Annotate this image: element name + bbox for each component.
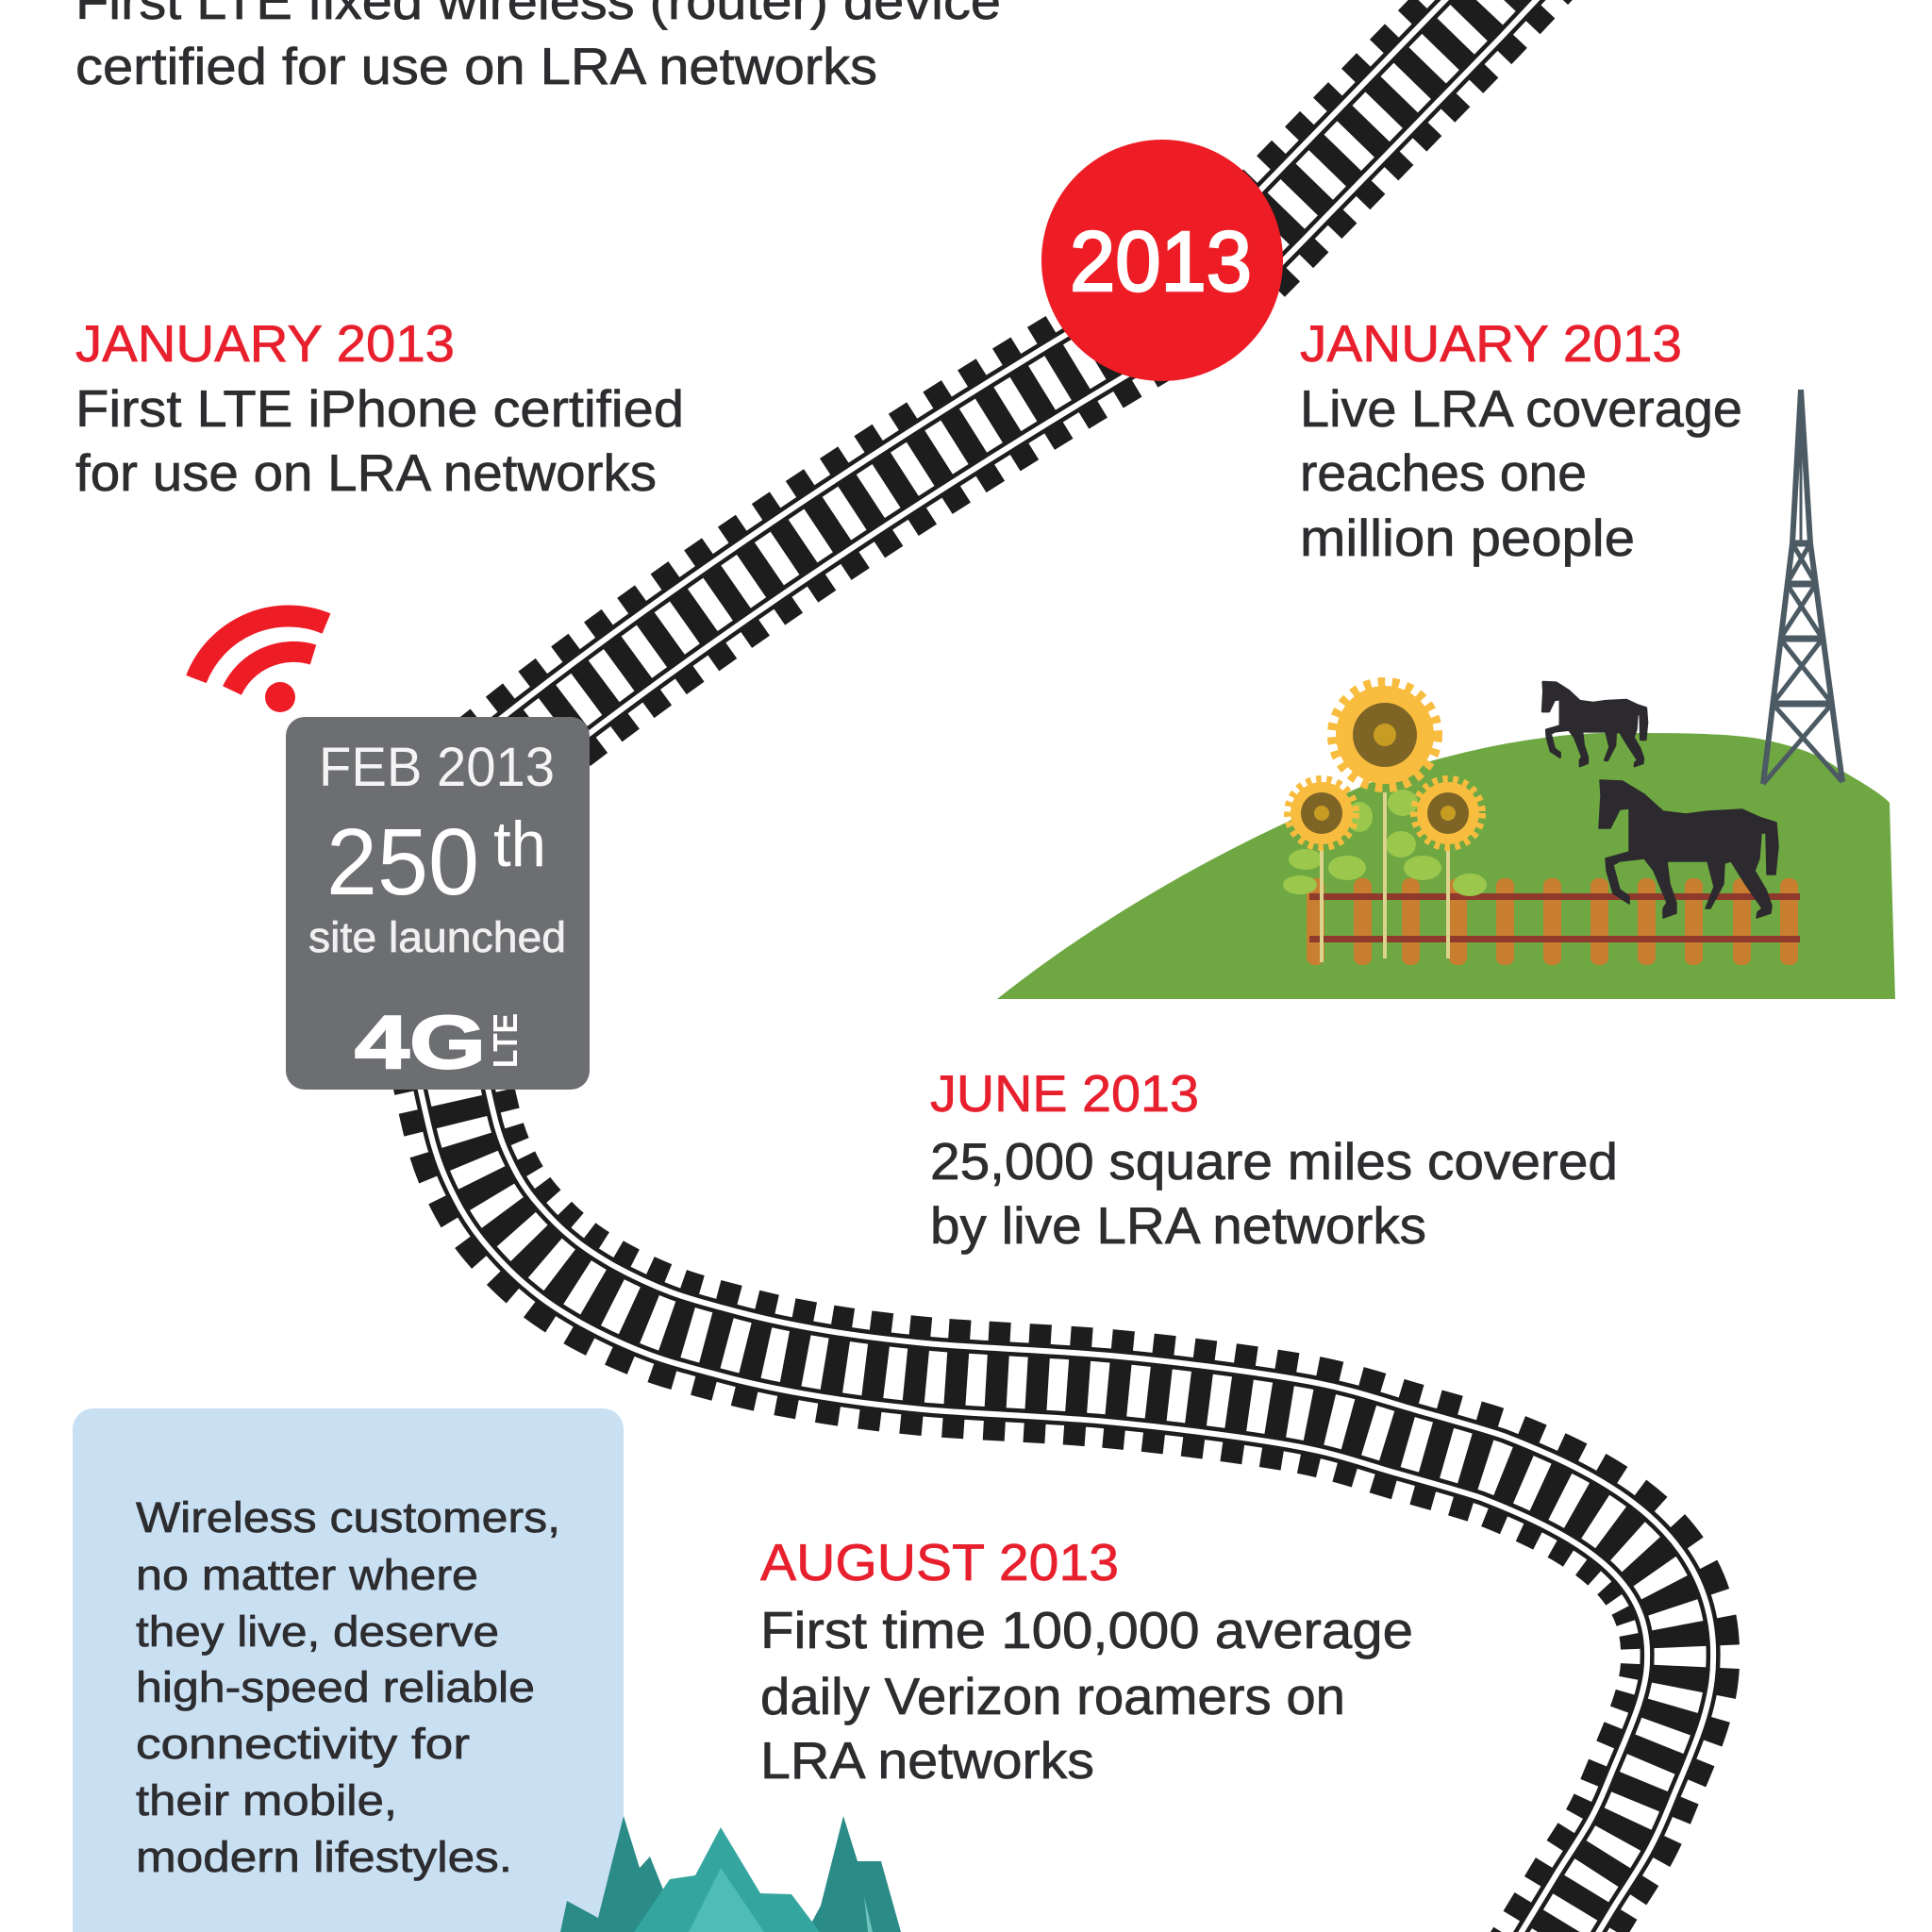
panel: customer quote xyxy=(73,1408,624,1932)
panel: customer quote: connectivity for xyxy=(136,1720,470,1768)
text: August 2013: First time 100,000 average xyxy=(760,1601,1413,1659)
year marker: 2013 xyxy=(1041,140,1283,381)
text: August 2013: daily Verizon roamers on xyxy=(760,1667,1345,1725)
callout: Feb 2013 250th site: site launched xyxy=(308,913,566,961)
small horse xyxy=(1542,682,1647,766)
text: January 2013 iPhone: First LTE iPhone certified xyxy=(75,379,684,438)
callout: Feb 2013 250th site: 4G xyxy=(355,1000,486,1084)
panel: customer quote: high-speed reliable xyxy=(136,1663,535,1711)
tower xyxy=(1763,390,1842,784)
sunflowers xyxy=(1283,686,1487,962)
text: January 2013 iPhone: JANUARY 2013 xyxy=(75,314,455,373)
text: August 2013 xyxy=(760,1533,1413,1790)
panel: customer quote: modern lifestyles. xyxy=(136,1833,512,1881)
text: June 2013: by live LRA networks xyxy=(930,1196,1426,1255)
panel: customer quote: Wireless customers, xyxy=(136,1493,560,1541)
text: January 2013 coverage: Live LRA coverage xyxy=(1300,379,1742,438)
panel: customer quote: no matter where xyxy=(136,1551,478,1599)
callout: Feb 2013 250th site xyxy=(286,717,590,1090)
fence xyxy=(1307,878,1800,965)
callout: Feb 2013 250th site: th xyxy=(493,808,546,880)
callout: Feb 2013 250th site: FEB 2013 xyxy=(319,737,555,798)
panel: customer quote: their mobile, xyxy=(136,1776,397,1824)
text: August 2013: LRA networks xyxy=(760,1731,1094,1790)
year marker: 2013: 2013 xyxy=(1070,215,1252,309)
text: June 2013 xyxy=(930,1064,1618,1255)
text: January 2013 coverage xyxy=(1300,314,1742,567)
hill xyxy=(997,733,1895,999)
text: January 2013 coverage: JANUARY 2013 xyxy=(1300,314,1682,373)
icon: wifi signal xyxy=(196,616,326,712)
panel: customer quote: they live, deserve xyxy=(136,1607,499,1656)
text: first LTE fixed wireless device: certified for use on LRA networks xyxy=(75,37,877,95)
callout: Feb 2013 250th site: LTE xyxy=(486,1013,525,1068)
text: January 2013 iPhone: for use on LRA networks xyxy=(75,443,657,502)
text: August 2013: AUGUST 2013 xyxy=(760,1533,1119,1591)
text: June 2013: 25,000 square miles covered xyxy=(930,1132,1618,1191)
text: June 2013: JUNE 2013 xyxy=(930,1064,1199,1123)
railway track xyxy=(393,0,1740,1932)
callout: Feb 2013 250th site: 250 xyxy=(326,809,479,915)
large horse xyxy=(1599,780,1778,918)
text: January 2013 iPhone xyxy=(75,314,684,502)
illustration: mountains xyxy=(560,1816,901,1932)
text: first LTE fixed wireless device xyxy=(75,0,1001,95)
text: January 2013 coverage: million people xyxy=(1300,508,1635,567)
illustration: countryside xyxy=(997,390,1895,999)
text: January 2013 coverage: reaches one xyxy=(1300,443,1587,502)
